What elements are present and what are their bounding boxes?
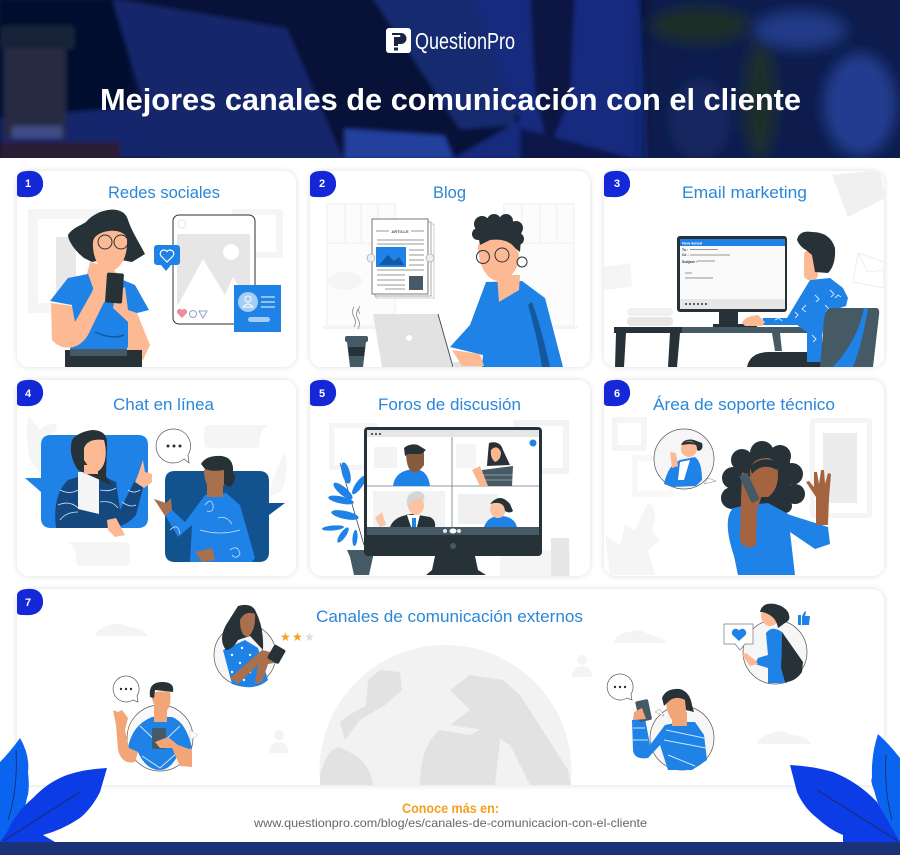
illustration: man at desk: [742, 232, 879, 367]
left chat bubble: [25, 435, 148, 528]
footer band: [0, 842, 900, 855]
illustration: woman rating: [214, 605, 286, 687]
logo: QuestionPro: QuestionPro: [415, 28, 515, 54]
header banner: [0, 0, 900, 170]
panel: foros de discusion: [310, 380, 590, 576]
agent bubble: [654, 429, 716, 489]
heading: Foros de discusión: [378, 395, 521, 414]
icon: heart message: [724, 624, 753, 650]
number badge 3: [604, 171, 630, 197]
number badge 2: 2: [319, 178, 325, 190]
icon: coffee cup: [345, 306, 368, 367]
logo: QuestionPro: [386, 28, 515, 54]
article document: [367, 219, 434, 298]
number badge 6: 6: [614, 388, 620, 400]
monitor: email window: [677, 236, 787, 327]
number badge 1: 1: [25, 178, 31, 190]
participant 2: [472, 442, 513, 486]
participant 4: [484, 498, 517, 527]
illustration: man waving: [113, 682, 198, 771]
illustration: man: [154, 456, 255, 562]
participant 1: [393, 444, 430, 486]
decoration: left leaves: [0, 738, 107, 842]
illustration: woman with bag: [742, 604, 807, 684]
monitor: email window: Cc :: [682, 253, 689, 257]
icon: chat bubble right: [607, 674, 633, 700]
laptop lid: [112, 0, 344, 160]
icon: thumbs up: [798, 611, 810, 625]
number badge 1: [17, 171, 43, 197]
footer call to action: Conoce más en:: [402, 800, 499, 816]
decoration: right leaves: [790, 734, 900, 842]
right chat bubble: [165, 471, 285, 562]
icon: heart bubble: [154, 245, 180, 271]
panel: redes sociales: [17, 171, 296, 367]
profile card: [234, 285, 281, 332]
icon: chat bubble left: [113, 676, 139, 702]
icon: star rating: ★: [304, 630, 315, 644]
illustration: woman on phone: [721, 441, 831, 575]
participant 3: [375, 491, 435, 527]
heading: Chat en línea: [113, 395, 215, 414]
illustration: woman typing: [450, 214, 563, 367]
monitor: email window: To :: [682, 248, 688, 252]
heading: Email marketing: [682, 183, 807, 202]
article document: ARTICLE: [391, 229, 409, 234]
heading: Área de soporte técnico: [653, 395, 835, 414]
globe: [320, 645, 572, 785]
panel: canales externos: [15, 587, 886, 787]
icon: potted plant: [322, 461, 373, 575]
illustration: woman with phone: [50, 210, 150, 367]
number badge 2: [310, 171, 336, 197]
monitor: video call: [364, 427, 542, 575]
grey chat bubbles: [68, 425, 268, 566]
number badge 3: 3: [614, 178, 620, 190]
heading: Canales de comunicación externos: [316, 607, 583, 626]
icon: star rating: ★: [280, 630, 291, 644]
number badge 7: 7: [25, 597, 31, 609]
number badge 7: [17, 589, 43, 615]
panel: blog: [310, 171, 590, 367]
panel: area de soporte tecnico: [604, 380, 884, 576]
number badge 6: [604, 380, 630, 406]
background clouds and person icons: [95, 624, 812, 753]
icon: speech bubble: [156, 429, 191, 463]
panel: chat en linea: [17, 380, 296, 576]
heading: Redes sociales: [108, 183, 220, 202]
icon: star rating: [280, 632, 314, 641]
icon: star rating: ★: [292, 630, 303, 644]
monitor: email window: Subject :: [682, 260, 697, 264]
illustration: man with phone: [632, 689, 714, 770]
monitor: email window: New Email: [682, 240, 702, 246]
panel: email marketing: [604, 170, 885, 367]
number badge 4: [17, 380, 43, 406]
title: Mejores canales de comunicación con el cliente: [100, 82, 801, 117]
number badge 5: [310, 380, 336, 406]
laptop: [373, 314, 487, 367]
number badge 5: 5: [319, 388, 325, 400]
footer url: www.questionpro.com/blog/es/canales-de-comunicacion-con-el-cliente: [253, 816, 647, 830]
number badge 4: 4: [25, 388, 32, 400]
desk: [614, 327, 810, 367]
social post card: [173, 215, 255, 324]
heading: Blog: [433, 183, 466, 202]
illustration: woman: [55, 430, 152, 537]
